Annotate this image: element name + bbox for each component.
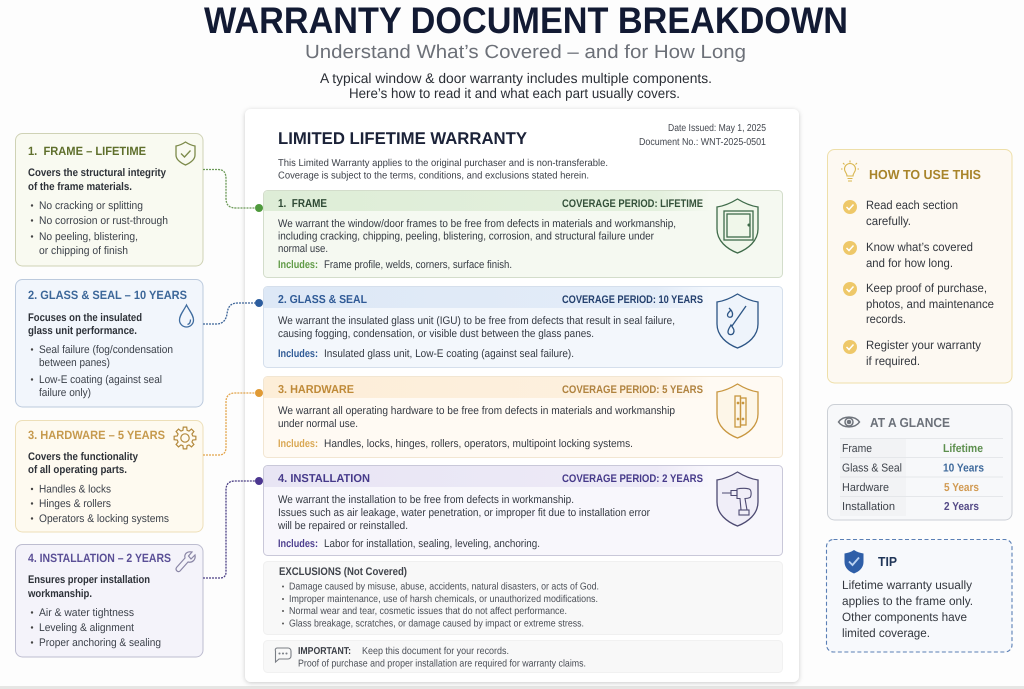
panel: frame summary (16, 134, 203, 266)
coverage period: COVERAGE PERIOD: LIFETIME (562, 198, 703, 210)
coverage period: COVERAGE PERIOD: 10 YEARS (562, 294, 703, 306)
description: of all operating parts. (28, 464, 127, 476)
coverage period: COVERAGE PERIOD: 5 YEARS (562, 384, 703, 396)
bullet list (31, 200, 168, 257)
includes line: Frame profile, welds, corners, surface finish. (324, 259, 512, 271)
tip heading: TIP (878, 554, 897, 569)
connector dot: glass and seal (255, 299, 263, 307)
section body: We warrant the installation to be free from defects in workmanship. (278, 494, 574, 506)
section: hardware (255, 376, 782, 458)
bullet list: or chipping of finish (39, 245, 128, 257)
exclusions heading: EXCLUSIONS (Not Covered) (279, 566, 407, 578)
panel: hardware summary (16, 420, 203, 532)
exclusions list (282, 582, 599, 630)
section: glass and seal (255, 286, 782, 368)
section body: Issues such as air leakage, water penetration, or improper fit due to installation error (278, 507, 650, 519)
document date and number (639, 123, 766, 148)
section: installation (255, 466, 782, 556)
section title: 1. FRAME (278, 198, 327, 210)
panel: at a glance (828, 404, 1012, 520)
table row: installation: 2 Years (944, 501, 979, 513)
section body (278, 218, 676, 255)
arrow: hardware connector (203, 393, 256, 455)
subtitle: Understand What’s Covered – and for How Long (305, 42, 746, 63)
tip text: limited coverage. (842, 626, 930, 640)
intro text: A typical window & door warranty includes multiple components. (320, 70, 712, 86)
includes line: Labor for installation, sealing, leveling, anchoring. (324, 538, 540, 550)
document intro: Coverage is subject to the terms, conditions, and exclusions stated herein. (278, 170, 589, 182)
checklist item 1: carefully. (866, 214, 911, 228)
section body (278, 405, 675, 430)
important text: Keep this document for your records. (362, 646, 509, 657)
panel heading: AT A GLANCE (870, 415, 950, 430)
panel: warranty document (245, 109, 799, 682)
document intro: This Limited Warranty applies to the original purchaser and is non-transferable. (278, 158, 608, 169)
description (28, 312, 142, 337)
includes line: Insulated glass unit, Low-E coating (against seal failure). (324, 348, 574, 360)
coverage period: COVERAGE PERIOD: 2 YEARS (562, 473, 703, 485)
section body: under normal use. (278, 418, 358, 430)
tip text (842, 578, 973, 640)
section body: We warrant the insulated glass unit (IGU) to be free from defects that result in seal failure, (278, 315, 675, 327)
table row: installation: Installation (842, 501, 895, 513)
bullet list: between panes) (39, 357, 110, 369)
bullet list: No corrosion or rust-through (39, 215, 168, 227)
bullet list: Hinges & rollers (39, 498, 111, 510)
section body: causing fogging, condensation, or visible dust between the glass panes. (278, 328, 594, 340)
title: WARRANTY DOCUMENT BREAKDOWN (204, 0, 848, 41)
connector dot: hardware (255, 389, 263, 397)
bullet list: Operators & locking systems (39, 513, 169, 525)
table row: installation (842, 501, 979, 513)
exclusions list: Damage caused by misuse, abuse, accidents, natural disasters, or acts of God. (289, 582, 599, 592)
icon: check shield (176, 142, 195, 165)
includes line: Includes: (278, 348, 318, 360)
table row: frame: Frame (842, 443, 872, 455)
icon: water drop (180, 305, 194, 327)
important text: Proof of purchase and proper installation are required for warranty claims. (298, 658, 586, 670)
checklist item 3: photos, and maintenance (866, 297, 994, 311)
icon: glass shield (717, 294, 758, 348)
icon: window shield (717, 199, 758, 253)
bullet list (31, 344, 173, 399)
description: Covers the structural integrity (28, 167, 167, 179)
table row: hardware: 5 Years (944, 482, 979, 494)
checklist item 3: Keep proof of purchase, (866, 281, 987, 295)
panel heading: HOW TO USE THIS (869, 167, 981, 182)
checklist item 4: Register your warranty (866, 338, 981, 352)
panel: tip (826, 540, 1012, 652)
important text: IMPORTANT: (298, 646, 351, 657)
checklist item 2 (843, 240, 973, 270)
panel: installation summary (16, 544, 203, 657)
checklist item 2: and for how long. (866, 256, 953, 270)
table row: glass and seal: Glass & Seal (842, 462, 902, 474)
important note (264, 640, 782, 672)
bullet list: Leveling & alignment (39, 622, 134, 634)
section body: normal use. (278, 243, 328, 255)
document date and number: Document No.: WNT-2025-0501 (639, 137, 766, 148)
description: Covers the functionality (28, 451, 139, 463)
description: Ensures proper installation (28, 574, 150, 586)
description (28, 167, 167, 193)
arrow: frame connector (203, 170, 256, 208)
bullet list: Low-E coating (against seal (39, 374, 162, 386)
document date and number: Date Issued: May 1, 2025 (668, 123, 766, 134)
table row: hardware: Hardware (842, 482, 889, 494)
checklist item 3: records. (866, 312, 906, 326)
section title: 2. GLASS & SEAL (278, 294, 367, 306)
includes line: Includes: (278, 259, 318, 271)
arrow: glass and seal connector (203, 303, 256, 324)
icon: hinge shield (717, 384, 758, 438)
document intro (278, 158, 608, 182)
document heading: LIMITED LIFETIME WARRANTY (278, 129, 528, 148)
intro text (320, 70, 712, 101)
checklist item 4 (843, 338, 981, 368)
section body (278, 315, 675, 340)
connector dot: frame (255, 204, 263, 212)
heading: glass and seal 10 years: 2. GLASS & SEAL – 10 YEARS (28, 288, 187, 302)
important text (298, 646, 586, 670)
icon: shield (844, 550, 864, 574)
bullet list: Air & water tightness (39, 607, 134, 619)
checklist item 1 (843, 198, 958, 228)
heading: installation 2 years: 4. INSTALLATION – 2 YEARS (28, 551, 171, 565)
heading: frame lifetime: 1. FRAME – LIFETIME (28, 144, 146, 158)
panel: how to use this (828, 150, 1012, 383)
description: Focuses on the insulated (28, 312, 142, 324)
checklist item 2: Know what’s covered (866, 240, 973, 254)
includes line: Includes: (278, 538, 318, 550)
icon: speech bubble (275, 648, 291, 662)
bullet list: failure only) (39, 387, 91, 399)
exclusions list: Improper maintenance, use of harsh chemicals, or unauthorized modifications. (289, 594, 598, 605)
table row: frame: Lifetime (943, 443, 983, 455)
section body: will be repaired or reinstalled. (277, 520, 408, 532)
description: glass unit performance. (28, 325, 137, 337)
icon: eye (838, 417, 860, 427)
checklist item 1: Read each section (866, 198, 958, 212)
icon: gear (174, 427, 196, 449)
description: of the frame materials. (28, 181, 132, 193)
section title: 4. INSTALLATION (278, 473, 370, 485)
description: workmanship. (27, 588, 92, 600)
connector dot: installation (255, 477, 263, 485)
bullet list (31, 484, 169, 525)
tip text: Other components have (842, 610, 967, 624)
intro text: Here’s how to read it and what each part usually covers. (349, 85, 680, 101)
table row: frame (842, 443, 983, 455)
table row: glass and seal: 10 Years (943, 462, 984, 474)
bullet list: Seal failure (fog/condensation (39, 344, 173, 356)
includes line: Handles, locks, hinges, rollers, operators, multipoint locking systems. (324, 438, 633, 450)
includes line: Includes: (278, 438, 318, 450)
section body: We warrant the window/door frames to be free from defects in materials and workmanship, (278, 218, 676, 230)
description (27, 574, 150, 600)
bullet list: Handles & locks (39, 484, 111, 496)
arrow: installation connector (203, 481, 256, 578)
exclusions box (264, 562, 782, 634)
section title: 3. HARDWARE (278, 384, 354, 396)
table row: glass and seal (842, 462, 984, 474)
exclusions list: Glass breakage, scratches, or damage caused by impact or extreme stress. (289, 618, 584, 630)
bullet list: No peeling, blistering, (39, 231, 138, 243)
section body: including cracking, chipping, peeling, blistering, corrosion, and structural failure under (278, 230, 654, 242)
tip text: applies to the frame only. (842, 594, 973, 608)
icon: wrench (176, 552, 195, 572)
heading: hardware 5 years: 3. HARDWARE – 5 YEARS (28, 428, 165, 442)
section body: We warrant all operating hardware to be free from defects in materials and workmanship (278, 405, 675, 417)
bullet list (31, 607, 161, 649)
section: frame (255, 190, 782, 278)
table row: hardware (842, 482, 979, 494)
exclusions list: Normal wear and tear, cosmetic issues that do not affect performance. (289, 606, 567, 617)
icon: drill shield (717, 472, 758, 526)
panel: glass and seal summary (16, 280, 203, 407)
checklist item 4: if required. (866, 354, 920, 368)
tip text: Lifetime warranty usually (842, 578, 972, 592)
checklist item 3 (843, 281, 994, 326)
icon: light bulb (841, 160, 859, 181)
bullet list: No cracking or splitting (39, 200, 143, 212)
bullet list: Proper anchoring & sealing (39, 637, 161, 649)
description (28, 451, 139, 476)
section body (277, 494, 650, 532)
